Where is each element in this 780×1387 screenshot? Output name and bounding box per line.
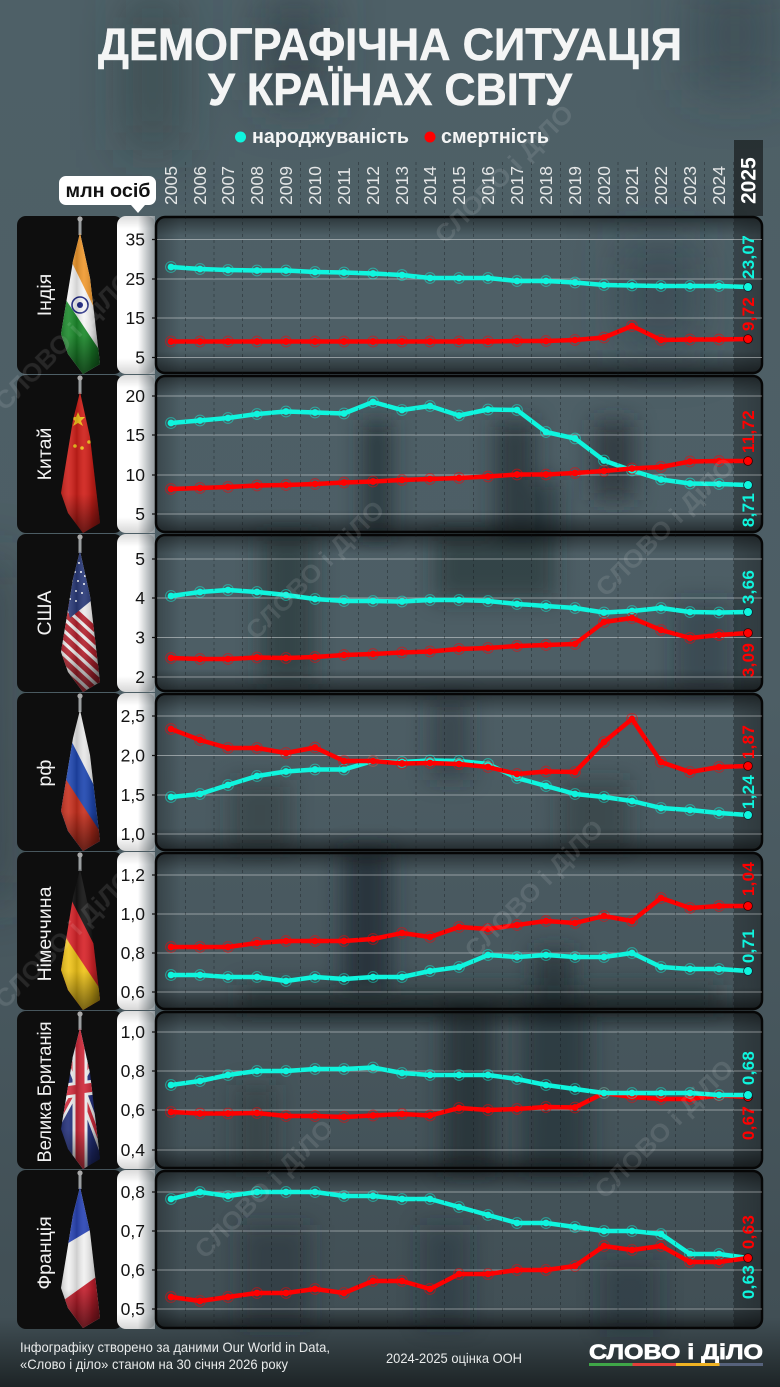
year axis labels: 2016 xyxy=(478,166,498,205)
birth rate line: China xyxy=(171,402,748,485)
panel: France: Франція xyxy=(34,1216,56,1290)
end values: USA xyxy=(739,570,758,677)
end values: USA: 3,09 xyxy=(739,643,758,677)
year axis labels: 2025 xyxy=(738,157,760,204)
end values: Germany xyxy=(739,862,758,963)
year axis labels: 2010 xyxy=(305,166,325,205)
end values: France xyxy=(739,1215,758,1299)
end values: China: 11,72 xyxy=(739,410,758,453)
end values: China xyxy=(739,410,758,527)
panel: China: 20 xyxy=(126,386,145,406)
panel: France xyxy=(17,1154,762,1354)
year axis labels: 2018 xyxy=(536,166,556,205)
panel: United Kingdom xyxy=(17,1011,762,1175)
year axis labels: 2007 xyxy=(218,166,238,205)
flag: United Kingdom xyxy=(50,1011,110,1175)
year axis labels: 2009 xyxy=(276,166,296,205)
panel: Germany xyxy=(17,852,764,1010)
legend xyxy=(235,126,549,148)
panel: USA xyxy=(17,534,764,692)
panel: China: 5 xyxy=(135,504,145,524)
year axis labels: 2017 xyxy=(507,166,527,205)
flag: India xyxy=(61,216,100,374)
watermarks xyxy=(0,99,740,1264)
panel: USA: 4 xyxy=(135,588,145,608)
source note: Інфографіку створено за даними Our World in Data, xyxy=(20,1339,330,1355)
panel: China xyxy=(17,375,762,539)
panel: Germany: 0,8 xyxy=(121,943,145,963)
watermarks: СЛОВО і ДіЛО xyxy=(589,1054,739,1204)
end values: United Kingdom: 0,67 xyxy=(739,1106,758,1140)
panel: India: 25 xyxy=(126,269,145,289)
end values: France: 0,63 xyxy=(739,1265,758,1299)
title: ДЕМОГРАФІЧНА СИТУАЦІЯ xyxy=(98,19,682,70)
panel: Germany: 1,0 xyxy=(121,904,145,924)
flag: USA xyxy=(61,534,100,692)
year axis labels: 2006 xyxy=(190,166,210,205)
year axis labels: 2013 xyxy=(392,166,412,205)
year axis labels: 2012 xyxy=(363,166,383,205)
birth rate line: France xyxy=(171,1192,748,1258)
source note: «Слово і діло» станом на 30 січня 2026 року xyxy=(20,1356,288,1372)
flag: russia xyxy=(61,693,100,851)
panel: United Kingdom: 0,4 xyxy=(121,1140,145,1160)
death rate line: China xyxy=(171,461,748,489)
panel: Germany: Німеччина xyxy=(34,886,56,981)
birth rate line: India xyxy=(171,267,748,287)
end values: France: 0,63 xyxy=(739,1215,758,1249)
panel: France: 0,7 xyxy=(121,1221,145,1241)
source note xyxy=(20,1339,330,1372)
logo: СЛОВО і ДіЛО xyxy=(589,1341,763,1364)
panel: russia: 1,0 xyxy=(121,824,145,844)
unit badge: млн осіб xyxy=(66,181,150,202)
death rate line: russia xyxy=(171,719,748,774)
end values: russia: 1,24 xyxy=(739,775,758,809)
panel: China: 15 xyxy=(126,425,145,445)
panel: USA: 3 xyxy=(135,628,145,648)
panel: United Kingdom: 1,0 xyxy=(121,1022,145,1042)
flag: China xyxy=(61,375,100,533)
panel: India: 15 xyxy=(126,308,145,328)
year axis labels: 2015 xyxy=(449,166,469,205)
end values: China: 8,71 xyxy=(739,493,758,527)
panel: China: Китай xyxy=(34,428,56,480)
panel: United Kingdom: 0,6 xyxy=(121,1100,145,1120)
death rate line: Germany xyxy=(171,898,748,947)
end values: russia xyxy=(739,725,758,809)
panel: United Kingdom: Велика Британія xyxy=(34,1022,56,1162)
legend: народжуваність xyxy=(252,126,409,148)
panel: USA: 5 xyxy=(135,549,145,569)
year axis labels xyxy=(161,157,760,205)
year axis labels: 2022 xyxy=(651,166,671,205)
end values: India: 9,72 xyxy=(739,297,758,331)
panel: Germany: 1,2 xyxy=(121,865,145,885)
panel: Germany: 0,6 xyxy=(121,982,145,1002)
end values: United Kingdom xyxy=(739,1051,758,1140)
panel: France: 0,6 xyxy=(121,1260,145,1280)
panel: India: 5 xyxy=(135,348,145,368)
end values: Germany: 1,04 xyxy=(739,862,758,896)
panel: russia: 1,5 xyxy=(121,785,145,805)
title: У КРАЇНАХ СВІТУ xyxy=(208,64,573,115)
vertical year grid lines xyxy=(186,162,734,1329)
year axis labels: 2023 xyxy=(680,166,700,205)
end values: USA: 3,66 xyxy=(739,570,758,604)
panel: India: 35 xyxy=(126,230,145,250)
panel: France: 0,5 xyxy=(121,1299,145,1319)
panel: russia xyxy=(17,692,764,852)
panel: russia: 2,0 xyxy=(121,746,145,766)
panel: India xyxy=(17,216,764,374)
death rate line: France xyxy=(171,1246,748,1301)
title xyxy=(98,19,682,115)
end values: India: 23,07 xyxy=(739,235,758,279)
2025 column header xyxy=(734,140,763,216)
flag: France xyxy=(50,1154,110,1354)
death rate line: USA xyxy=(171,618,748,659)
year axis labels: 2024 xyxy=(709,166,729,205)
year axis labels: 2021 xyxy=(622,166,642,205)
end values: India xyxy=(739,235,758,331)
year axis labels: 2014 xyxy=(420,166,440,205)
panel: USA: США xyxy=(34,591,56,635)
panel: India: Індія xyxy=(34,274,56,316)
unit badge xyxy=(59,176,156,213)
birth rate line: USA xyxy=(171,590,748,612)
legend: смертність xyxy=(441,126,549,148)
year axis labels: 2008 xyxy=(247,166,267,205)
birth rate line: Germany xyxy=(171,953,748,981)
watermarks: СЛОВО і ДіЛО xyxy=(240,495,390,645)
watermarks: СЛОВО і ДіЛО xyxy=(189,1114,339,1264)
estimate note: 2024-2025 оцінка ООН xyxy=(386,1350,522,1366)
watermarks: СЛОВО і ДіЛО xyxy=(429,99,579,249)
panel: russia: 2,5 xyxy=(121,706,145,726)
death rate line: United Kingdom xyxy=(171,1093,748,1117)
birth rate line: United Kingdom xyxy=(171,1068,748,1095)
end values: Germany: 0,71 xyxy=(739,929,758,963)
year axis labels: 2019 xyxy=(565,166,585,205)
year axis labels: 2005 xyxy=(161,166,181,205)
watermarks: СЛОВО і ДіЛО xyxy=(459,814,609,964)
year axis labels: 2020 xyxy=(594,166,614,205)
end values: United Kingdom: 0,68 xyxy=(739,1051,758,1085)
panel: russia: рф xyxy=(34,760,56,786)
panel: China: 10 xyxy=(126,465,145,485)
birth rate line: russia xyxy=(171,760,748,815)
flag: Germany xyxy=(61,852,100,1010)
death rate line: India xyxy=(171,326,748,342)
end values: russia: 1,87 xyxy=(739,725,758,759)
panel: USA: 2 xyxy=(135,667,145,687)
year axis labels: 2011 xyxy=(334,167,354,205)
panel: France: 0,8 xyxy=(121,1182,145,1202)
watermarks: СЛОВО і ДіЛО xyxy=(590,452,740,602)
panel: United Kingdom: 0,8 xyxy=(121,1061,145,1081)
